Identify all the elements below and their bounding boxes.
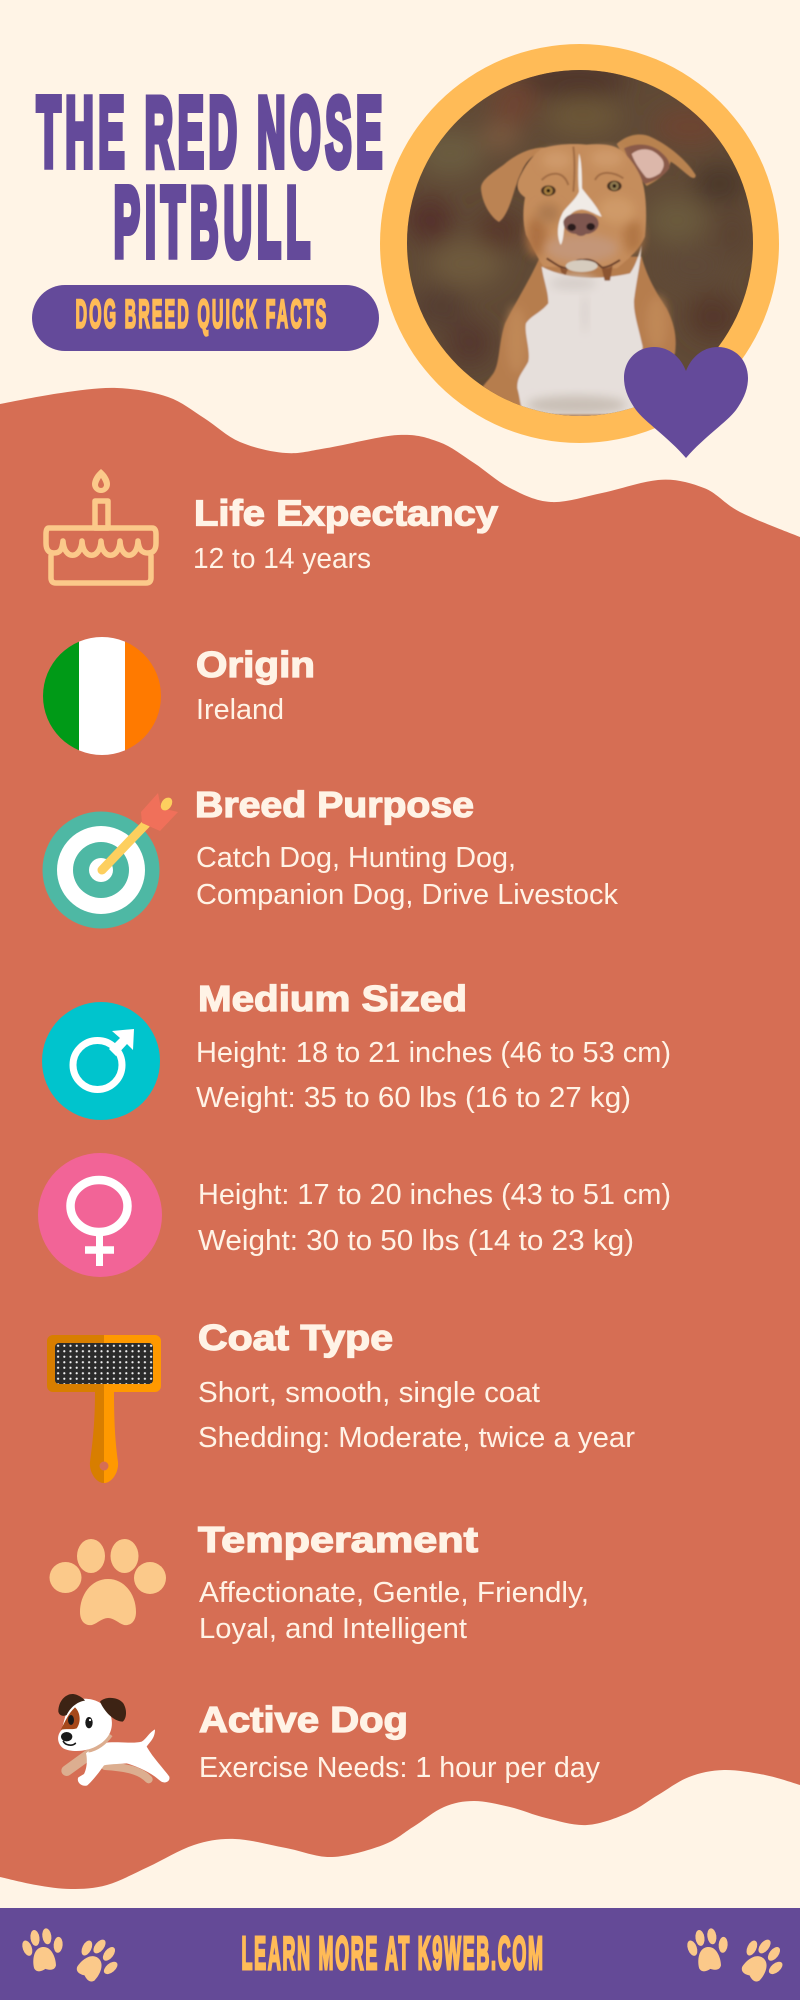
icon: irish flag xyxy=(43,637,161,755)
text: coat details: Short, smooth, single coat xyxy=(198,1377,540,1409)
face shading xyxy=(527,217,547,257)
icon: paw left 2 xyxy=(67,1931,127,1990)
text: traits: Loyal, and Intelligent xyxy=(199,1613,467,1645)
text: life span: 12 to 14 years xyxy=(193,543,371,575)
heading: life expectancy: Life Expectancy xyxy=(194,492,498,534)
text: female size: Height: 17 to 20 inches (43 to 51 cm) xyxy=(198,1179,671,1211)
text: traits: Affectionate, Gentle, Friendly, xyxy=(199,1577,589,1609)
section: origin xyxy=(43,637,315,755)
section: medium sized male xyxy=(42,978,671,1120)
icon: running puppy xyxy=(58,1694,169,1786)
icon: paw left 1 xyxy=(19,1926,67,1973)
pill: dog breed quick facts xyxy=(32,285,379,351)
footer bar xyxy=(0,1908,800,2000)
white chest xyxy=(517,245,643,414)
heading: active dog: Active Dog xyxy=(199,1699,408,1740)
body xyxy=(482,257,676,418)
text: male size: Height: 18 to 21 inches (46 to 53 cm) xyxy=(196,1037,671,1069)
heading: medium sized: Medium Sized xyxy=(198,978,467,1019)
icon: female symbol xyxy=(38,1153,162,1277)
title: THE RED NOSE xyxy=(37,77,382,187)
muzzle xyxy=(545,234,618,262)
section: life expectancy xyxy=(46,469,498,583)
coral wavy panel xyxy=(0,388,800,1889)
title xyxy=(37,77,382,277)
section: active dog xyxy=(58,1694,601,1786)
icon: paw right 2 xyxy=(732,1931,792,1990)
photo: red nose pitbull in orange ring xyxy=(380,44,779,443)
nose xyxy=(563,213,599,236)
text: female size: Weight: 30 to 50 lbs (14 to 23 kg) xyxy=(198,1225,634,1257)
text: ireland: Ireland xyxy=(196,694,284,726)
text: purposes: Catch Dog, Hunting Dog, xyxy=(196,842,516,874)
head xyxy=(518,144,646,268)
right ear xyxy=(617,135,696,186)
text: female size xyxy=(198,1179,671,1257)
text: exercise needs: Exercise Needs: 1 hour per day xyxy=(199,1752,601,1784)
heading: temperament: Temperament xyxy=(198,1519,478,1560)
icon: target with arrow xyxy=(42,793,178,928)
icon: slicker brush xyxy=(47,1335,161,1483)
section: breed purpose xyxy=(42,784,619,928)
icon: paw print xyxy=(50,1539,166,1625)
heading: coat type: Coat Type xyxy=(198,1317,393,1358)
pill: dog breed quick facts: DOG BREED QUICK FACTS xyxy=(76,292,326,337)
text: purposes: Companion Dog, Drive Livestock xyxy=(196,879,619,911)
icon: purple heart xyxy=(624,347,748,458)
section: temperament xyxy=(50,1519,589,1645)
white blaze xyxy=(558,153,602,245)
text: male size xyxy=(196,1037,671,1114)
text: traits xyxy=(199,1577,589,1645)
title: PITBULL xyxy=(114,167,310,277)
footer text: LEARN MORE AT K9WEB.COM xyxy=(242,1928,543,1980)
left ear xyxy=(481,147,545,222)
text: coat details: Shedding: Moderate, twice a year xyxy=(198,1422,636,1454)
text: male size: Weight: 35 to 60 lbs (16 to 27 kg) xyxy=(196,1082,631,1114)
heading: origin: Origin xyxy=(196,644,315,685)
section: female size xyxy=(38,1153,671,1277)
text: coat details xyxy=(198,1377,636,1454)
icon: birthday cake xyxy=(46,469,156,583)
text: purposes xyxy=(196,842,619,911)
icon: male symbol xyxy=(42,1002,160,1120)
section: coat type xyxy=(47,1317,636,1483)
eyes xyxy=(541,185,556,196)
icon: paw right 1 xyxy=(684,1926,732,1973)
heading: breed purpose: Breed Purpose xyxy=(195,784,474,825)
